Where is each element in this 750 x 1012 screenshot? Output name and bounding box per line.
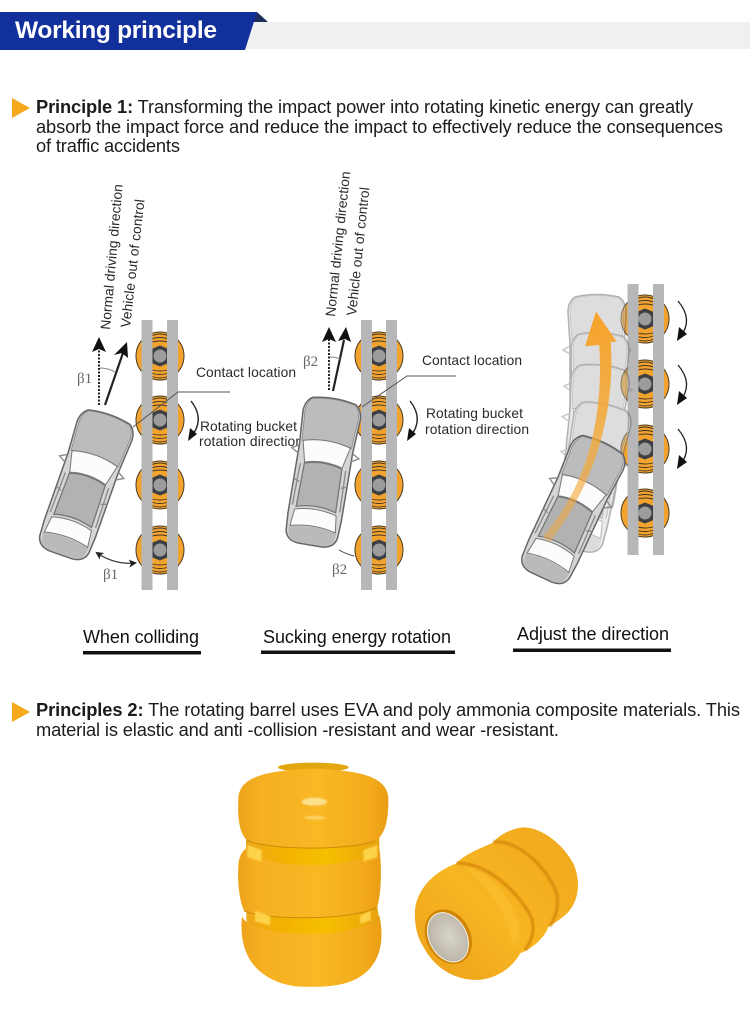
rotation direction note 1 (188, 401, 303, 449)
beta 2 angle marks (303, 354, 354, 578)
barrels column 1 (136, 320, 184, 590)
direction labels 2 (323, 171, 372, 317)
bore (419, 906, 477, 969)
upper reflective band (246, 837, 379, 872)
direction arrows 1 (92, 337, 128, 405)
band edge shadows (244, 840, 377, 918)
caption: adjust the direction (513, 624, 671, 652)
contact location callout 1: Contact location (196, 365, 296, 380)
rotation direction note 2 (407, 401, 529, 441)
barrels column 3 (621, 284, 669, 555)
top section (238, 769, 388, 848)
contact location callout 2 (362, 353, 522, 407)
middle section (238, 849, 381, 918)
direction labels 1: Vehicle out of control (118, 198, 148, 328)
principle 1 paragraph: Principle 1: Transforming the impact power into rotating kinetic energy can greatly (36, 96, 693, 117)
title: Working principle (15, 17, 217, 44)
caption: sucking energy rotation: Sucking energy rotation (263, 627, 451, 647)
bottom section (241, 915, 381, 987)
car 2 (276, 393, 368, 551)
direction labels 2: Normal driving direction (323, 171, 353, 317)
diagram 2: sucking energy rotation (276, 171, 529, 590)
header fold triangle (253, 12, 268, 22)
barrel shine (467, 868, 520, 950)
header grey strip (245, 22, 750, 49)
top opening (278, 763, 349, 772)
bullet triangle (12, 98, 30, 118)
bore rim (415, 901, 481, 972)
diagram 1: when colliding (29, 184, 303, 590)
principle 2 paragraph: Principles 2: The rotating barrel uses EVA and poly ammonia composite materials. This (36, 699, 740, 720)
rotation direction note 2: rotation direction (425, 422, 529, 437)
rotation direction note 2: Rotating bucket (426, 406, 523, 421)
rotation arrows 3 (677, 301, 687, 469)
product photo: lying barrel (415, 827, 578, 980)
principle 1 paragraph: of traffic accidents (36, 135, 180, 156)
highlights (247, 798, 377, 925)
car 3 (510, 428, 635, 592)
beta 2 angle marks: β2 (332, 562, 347, 578)
caption: when colliding: When colliding (83, 627, 199, 647)
groove lines (457, 842, 557, 950)
direction labels 2: Vehicle out of control (344, 186, 372, 316)
principle 2 paragraph: material is elastic and anti -collision -resistant and wear -resistant. (36, 719, 559, 740)
caption: adjust the direction: Adjust the direction (517, 624, 669, 644)
orange trajectory arrow (543, 312, 617, 542)
beta 2 angle marks: β2 (303, 354, 318, 370)
barrel body (415, 827, 578, 980)
rotation direction note 1: rotation direction (199, 434, 303, 449)
beta 1 angle marks: β1 (77, 371, 92, 387)
direction arrows 2 (322, 327, 351, 391)
header blue tab (0, 12, 257, 50)
diagram 3: adjust the direction (510, 284, 687, 592)
contact location callout 2: Contact location (422, 353, 522, 368)
direction labels 1: Normal driving direction (98, 184, 126, 330)
principle 2 text block (12, 699, 740, 740)
beta 1 angle marks: β1 (103, 567, 118, 583)
ghost car positions (542, 294, 639, 556)
direction labels 1 (98, 184, 148, 330)
principle 1 text block (12, 96, 723, 156)
bullet triangle (12, 702, 30, 722)
principle 1 paragraph: absorb the impact force and reduce the impact to effectively reduce the consequences (36, 116, 723, 137)
beta 1 angle marks (77, 371, 135, 583)
car 1 (29, 403, 142, 566)
barrels column 2 (355, 320, 403, 590)
rotation direction note 1: Rotating bucket (200, 419, 297, 434)
lower reflective band (246, 905, 379, 937)
contact location callout 1 (133, 365, 296, 427)
product photo: upright barrel (238, 763, 388, 987)
header banner (0, 12, 750, 50)
